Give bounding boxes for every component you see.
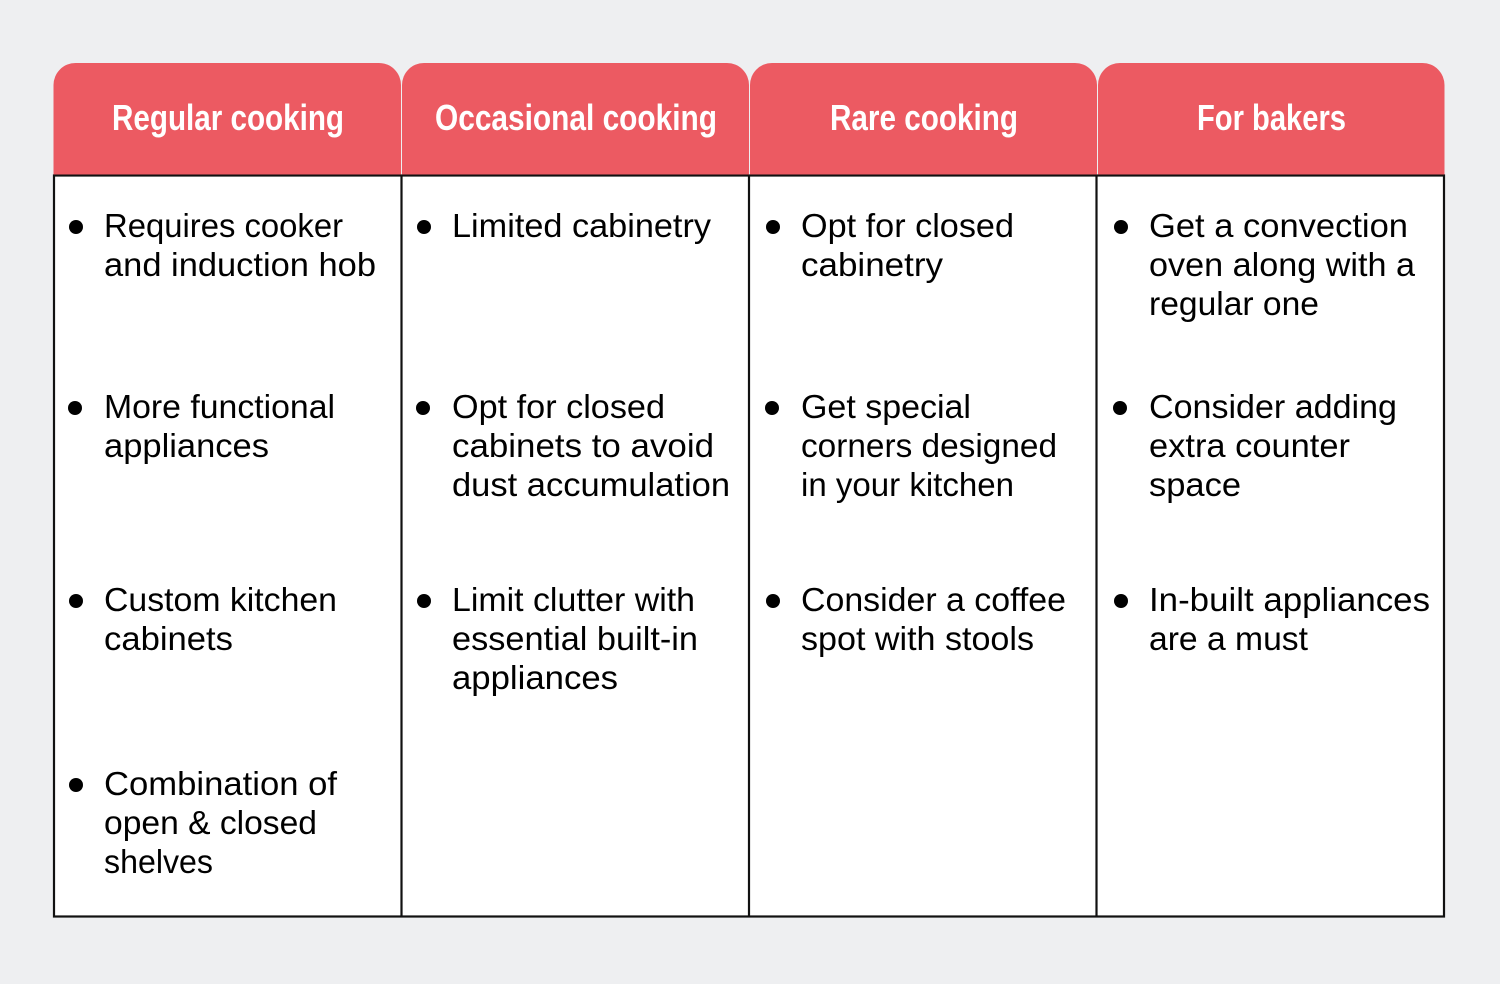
list: rare cooking: Get special <box>801 388 971 425</box>
list: occasional cooking: essential built-in <box>452 620 698 657</box>
list: rare cooking: spot with stools <box>801 620 1034 657</box>
list: occasional cooking: Limited cabinetry <box>452 207 712 244</box>
list: for bakers: space <box>1149 466 1241 503</box>
list: regular cooking: and induction hob <box>104 246 376 283</box>
list: regular cooking: Requires cooker <box>104 207 343 244</box>
header: occasional cooking <box>402 63 749 174</box>
panel: rare cooking <box>750 63 1097 657</box>
list: for bakers: Consider adding <box>1149 388 1397 425</box>
list: occasional cooking: cabinets to avoid <box>452 427 714 464</box>
list: occasional cooking <box>416 207 730 696</box>
list: rare cooking <box>765 207 1066 657</box>
list: for bakers: In-built appliances <box>1149 581 1430 618</box>
list: occasional cooking: Limit clutter with <box>452 581 695 618</box>
list: for bakers: Get a convection <box>1149 207 1408 244</box>
list: rare cooking: in your kitchen <box>801 466 1014 503</box>
header: for bakers: For bakers <box>1197 97 1346 138</box>
panel: occasional cooking <box>402 63 749 696</box>
list: regular cooking: Combination of <box>104 765 338 802</box>
list: occasional cooking: dust accumulation <box>452 466 730 503</box>
panel: for bakers <box>1098 63 1445 657</box>
list: regular cooking: Custom kitchen <box>104 581 337 618</box>
header: regular cooking: Regular cooking <box>112 97 344 138</box>
list: rare cooking: cabinetry <box>801 246 944 283</box>
list: for bakers: are a must <box>1149 620 1308 657</box>
list: regular cooking: cabinets <box>104 620 233 657</box>
list: regular cooking: appliances <box>104 427 269 464</box>
list: rare cooking: Consider a coffee <box>801 581 1066 618</box>
list: for bakers: extra counter <box>1149 427 1350 464</box>
list: rare cooking: corners designed <box>801 427 1057 464</box>
list: regular cooking: More functional <box>104 388 335 425</box>
list: rare cooking: Opt for closed <box>801 207 1014 244</box>
list: for bakers: regular one <box>1149 285 1319 322</box>
header: for bakers <box>1098 63 1445 174</box>
panel: regular cooking <box>54 63 401 880</box>
header: occasional cooking: Occasional cooking <box>435 97 717 138</box>
table body <box>54 176 1444 916</box>
list: regular cooking: open & closed <box>104 804 317 841</box>
list: occasional cooking: Opt for closed <box>452 388 665 425</box>
list: for bakers: oven along with a <box>1149 246 1416 283</box>
header: rare cooking <box>750 63 1097 174</box>
list: regular cooking: shelves <box>104 843 213 880</box>
list: for bakers <box>1113 207 1430 657</box>
header: regular cooking <box>54 63 401 174</box>
header: rare cooking: Rare cooking <box>830 97 1018 138</box>
list: regular cooking <box>68 207 376 880</box>
list: occasional cooking: appliances <box>452 659 618 696</box>
